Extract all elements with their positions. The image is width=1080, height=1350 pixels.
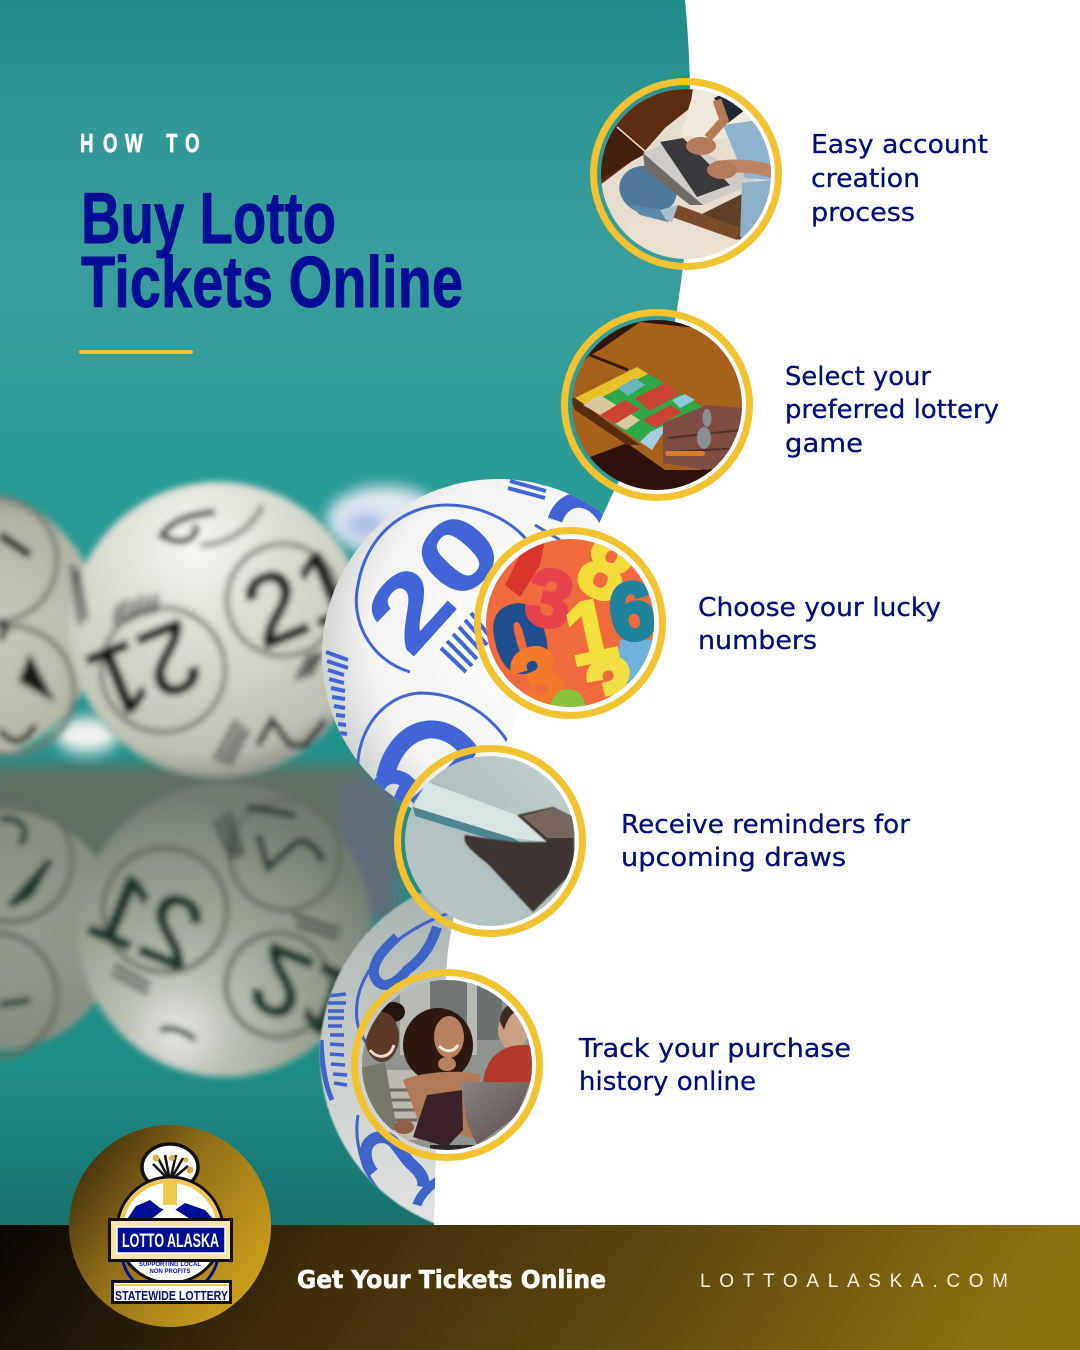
step 5: three friends with laptops photo [354, 972, 540, 1158]
step 1: laptop photo [594, 82, 778, 266]
step 3: colourful numbers photo: 3 [578, 637, 647, 739]
step 3: colourful numbers photo: 8 [565, 516, 647, 621]
logo badge [69, 1125, 271, 1327]
step 2: scratch card photo [564, 312, 750, 498]
logo badge: SUPPORTING LOCAL [139, 1262, 201, 1268]
step 3 text: Choose your lucky [698, 593, 941, 623]
step 5 text: Track your purchase [578, 1034, 851, 1064]
title: Buy Lotto [81, 179, 336, 259]
large white ball with blue 20: 20 [344, 491, 524, 674]
lower reflected ball [319, 892, 454, 1224]
step 3: colourful numbers photo: 3 [499, 626, 575, 730]
step 4 text: upcoming draws [621, 843, 846, 873]
title: Tickets Online [81, 243, 463, 323]
logo badge: STATEWIDE LOTTERY [115, 1288, 228, 1303]
step 3: colourful numbers photo: 3 [519, 550, 581, 647]
step 3: colourful numbers photo: 6 [603, 564, 662, 659]
white diagonal panel [434, 0, 1080, 1225]
step 2 text: preferred lottery [785, 395, 999, 425]
large white ball with blue 20 [322, 479, 604, 808]
step 4 text [621, 810, 910, 873]
step 1 text [811, 130, 988, 228]
step 5 text [578, 1034, 851, 1097]
step 5 text: history online [579, 1067, 756, 1097]
footer bar [0, 1225, 1080, 1350]
step 1 text: process [811, 198, 915, 228]
step 2 text: Select your [785, 362, 931, 392]
step 1 text: creation [811, 164, 920, 194]
step 3: colourful numbers photo: 0 [484, 584, 557, 693]
step 4 text: Receive reminders for [621, 810, 910, 840]
title underline [79, 350, 193, 354]
footer call to action: Get Your Tickets Online [297, 1265, 606, 1294]
title [81, 179, 463, 323]
blurred lottery balls: 21 [228, 525, 373, 670]
blurred lottery balls: 21 [74, 599, 216, 741]
heading: how to: HOW TO [80, 128, 200, 158]
step 4: phone in hand photo [398, 748, 582, 934]
logo badge: NON PROFITS [149, 1269, 191, 1275]
logo badge: LOTTO ALASKA [122, 1231, 219, 1252]
step 3: colourful numbers photo [474, 527, 666, 719]
blurred lottery balls [0, 482, 443, 1077]
blurred lottery balls: 21 [236, 923, 374, 1060]
step 1 text: Easy account [811, 130, 988, 160]
blurred lottery balls: 21 [76, 849, 218, 991]
step 3: colourful numbers photo: 1 [556, 578, 625, 685]
step 2 text: game [785, 429, 863, 459]
footer website: LOTTOALASKA.COM [700, 1271, 1008, 1292]
step 3 text [698, 593, 941, 656]
step 3 text: numbers [698, 626, 817, 656]
step 2 text [785, 362, 999, 459]
